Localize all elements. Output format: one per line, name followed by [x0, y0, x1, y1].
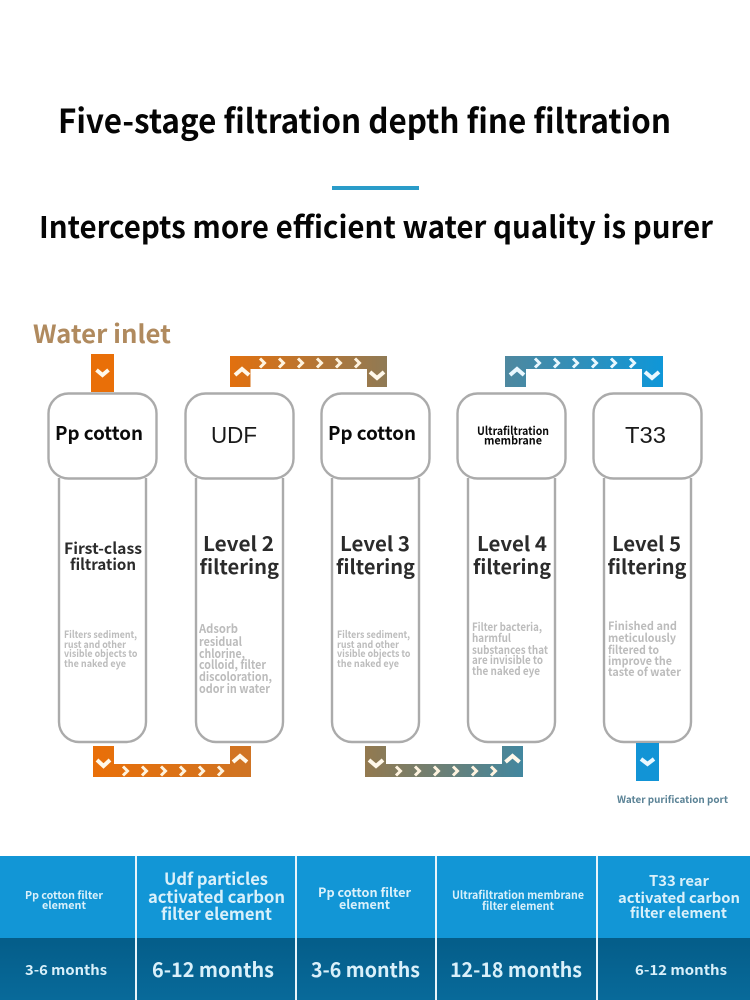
filter 4 stage heading: [473, 528, 551, 580]
column 4 element name: Ultrafiltration membrane: [452, 887, 584, 903]
filter 1 stage heading: First-class: [64, 537, 142, 559]
filter 5 description: taste of water: [608, 664, 682, 680]
filter 2 description: odor in water: [199, 680, 271, 697]
column 5 element name: activated carbon: [618, 887, 740, 908]
filter 2 description: residual: [199, 633, 242, 650]
water inlet label: Water inlet: [33, 315, 171, 351]
filter 5 description: [608, 618, 682, 680]
filter 1 description: the naked eye: [64, 655, 126, 670]
filter 5 stage heading: Level 5: [612, 528, 681, 557]
arrow: inlet pipe: [91, 354, 114, 392]
column 4 lifespan: 12-18 months: [450, 954, 582, 983]
filter 5 description: filtered to: [608, 642, 659, 658]
filter 1 stage heading: [64, 537, 142, 575]
title: Five-stage filtration depth fine filtration: [58, 95, 671, 143]
column 5 element name: [618, 870, 740, 923]
column 2 element name: activated carbon: [148, 884, 285, 908]
filter 3 description: the naked eye: [337, 655, 399, 670]
panel: filter 2: [186, 394, 294, 742]
filter 5 description: meticulously: [608, 630, 676, 646]
arrow: outlet pipe: [636, 743, 659, 781]
filter 3 stage heading: Level 3: [340, 528, 410, 557]
filter 2 description: Adsorb: [198, 620, 238, 637]
column 5 element name: filter element: [630, 902, 727, 923]
column 1 element name: element: [42, 898, 87, 913]
filter 1 description: Filters sediment,: [64, 626, 137, 641]
filter 2 stage heading: Level 2: [203, 528, 274, 557]
column 3 element name: element: [339, 894, 391, 913]
filter 4 description: [472, 619, 548, 679]
panel: filter 4: [458, 394, 566, 742]
column 2 element name: filter element: [161, 901, 272, 925]
filter 4 description: are invisible to: [472, 652, 543, 668]
filter 5 description: Finished and: [608, 618, 677, 634]
filter 2 description: discoloration,: [199, 668, 272, 685]
filter 4 name: [477, 423, 549, 448]
column 1 element name: Pp cotton filter: [25, 888, 103, 903]
filter 4 description: substances that: [472, 642, 548, 658]
filter 5 stage heading: [608, 528, 687, 580]
column 2 element name: Udf particles: [164, 866, 268, 890]
filter 2 description: [198, 620, 272, 697]
column 2 element name: [148, 866, 285, 925]
filter 1 description: visible objects to: [64, 645, 138, 660]
filter 2 description: chlorine,: [199, 645, 245, 662]
panel: filter 1: [48, 394, 156, 742]
title accent bar: [332, 186, 419, 190]
column 1 element name: [25, 888, 103, 913]
column 5 element name: T33 rear: [649, 870, 710, 891]
panel: filter 5: [594, 394, 702, 742]
filter 1 stage heading: filtration: [70, 553, 136, 575]
filter 4 name: membrane: [484, 432, 542, 448]
column 2 lifespan: 6-12 months: [152, 954, 274, 983]
filter 2 name: UDF: [211, 422, 257, 448]
filter 2 description: colloid, filter: [199, 656, 267, 673]
filter 4 name: Ultrafiltration: [477, 423, 549, 439]
filter 4 stage heading: Level 4: [477, 528, 547, 557]
column 3 element name: [318, 882, 412, 913]
arrow: connector from filter 4 to filter 5: [505, 356, 663, 387]
filter 4 description: Filter bacteria,: [472, 619, 542, 635]
filter 5 description: improve the: [608, 653, 672, 669]
filter 5 stage heading: filtering: [608, 551, 687, 580]
column 4 element name: filter element: [482, 898, 554, 914]
filter 3 description: rust and other: [337, 636, 400, 651]
filter 1 description: rust and other: [64, 636, 127, 651]
filter 4 description: the naked eye: [472, 663, 540, 679]
panel: filter element replacement table: [0, 856, 750, 1000]
arrow: connector from filter 3 to filter 4: [365, 746, 523, 777]
subtitle: Intercepts more efficient water quality is purer: [39, 203, 714, 247]
column 3 element name: Pp cotton filter: [318, 882, 412, 901]
filter 4 description: harmful: [472, 630, 511, 646]
filter 5 name: T33: [625, 422, 666, 448]
filter 1 description: [64, 626, 138, 670]
column 3 lifespan: 3-6 months: [311, 954, 420, 983]
filter 2 stage heading: [200, 528, 279, 580]
filter 3 description: Filters sediment,: [337, 626, 410, 641]
filter 3 description: visible objects to: [337, 645, 410, 660]
filter 4 stage heading: filtering: [473, 551, 551, 580]
filter 1 name: Pp cotton: [55, 419, 143, 446]
panel: filter 3: [322, 394, 430, 742]
water purification port label: Water purification port: [617, 791, 729, 806]
arrow: connector from filter 1 to filter 2: [93, 746, 251, 777]
arrow: connector from filter 2 to filter 3: [230, 356, 387, 387]
column 4 element name: [452, 887, 584, 914]
column 5 lifespan: 6-12 months: [635, 960, 727, 980]
column 1 lifespan: 3-6 months: [25, 960, 107, 980]
filter 3 name: Pp cotton: [328, 419, 416, 446]
filter 2 stage heading: filtering: [200, 551, 279, 580]
filter 3 description: [337, 626, 410, 670]
filter 3 stage heading: filtering: [336, 551, 415, 580]
filter 3 stage heading: [336, 528, 415, 580]
